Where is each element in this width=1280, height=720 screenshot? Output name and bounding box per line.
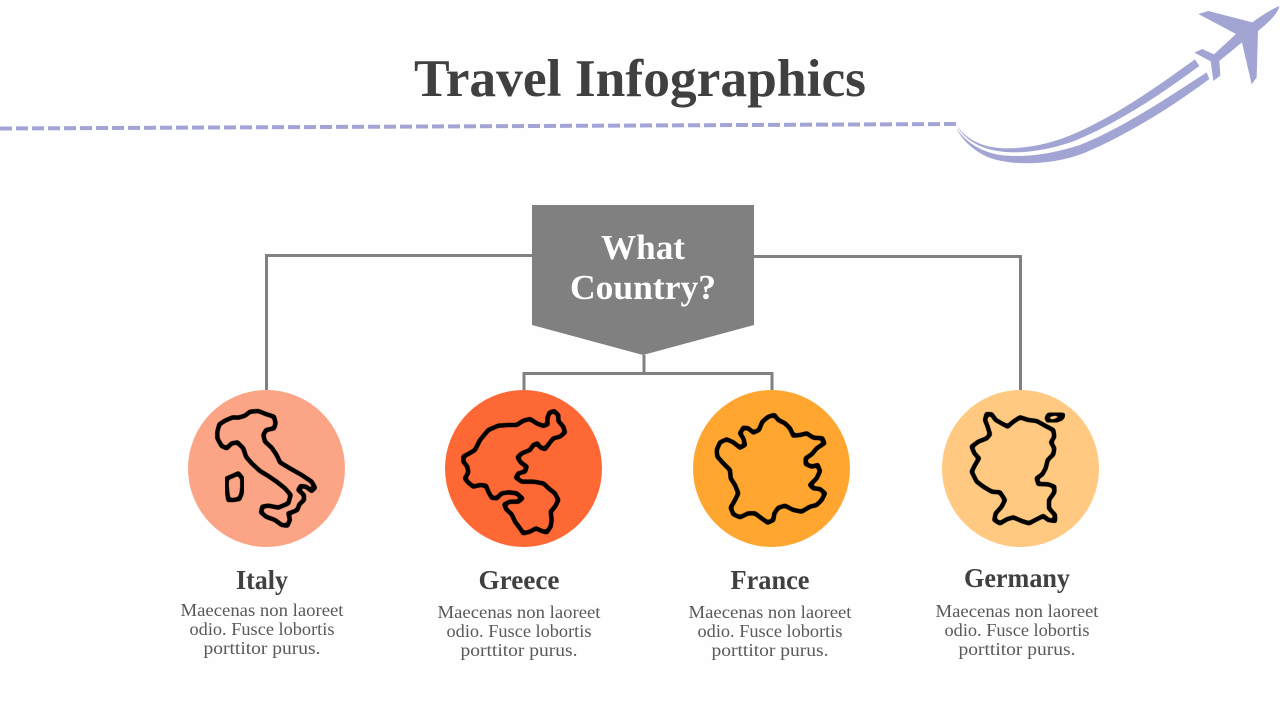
heading: Italy: Italy — [236, 565, 288, 595]
panel: Greece — [438, 390, 602, 660]
circle: Germany — [942, 390, 1099, 547]
text: Greece description: odio. Fusce lobortis — [446, 621, 592, 641]
circle: France — [693, 390, 850, 547]
text: Germany description: Maecenas non laoreet — [936, 601, 1099, 621]
circle: Greece — [445, 390, 602, 547]
callout: What Country? — [532, 205, 754, 355]
text: Greece description: porttitor purus. — [460, 640, 578, 660]
heading: Germany: Germany — [964, 563, 1070, 593]
icon: Greece map — [463, 411, 565, 533]
heading: Greece: Greece — [478, 565, 560, 595]
text: Italy description: Maecenas non laoreet — [180, 600, 344, 620]
text: Greece description — [438, 602, 601, 660]
text: France description — [688, 602, 852, 660]
icon: Italy map — [217, 411, 315, 526]
connector lines — [266, 256, 1020, 390]
callout: What Country?: What — [601, 228, 685, 267]
text: Italy description — [180, 600, 344, 658]
panel: Italy — [180, 390, 345, 658]
callout: What Country?: Country? — [570, 268, 716, 307]
text: Germany description: odio. Fusce lobortis — [944, 620, 1090, 640]
text: France description: porttitor purus. — [712, 640, 828, 660]
panel: France — [688, 390, 852, 660]
text: Italy description: odio. Fusce lobortis — [190, 619, 335, 639]
text: France description: odio. Fusce lobortis — [698, 621, 843, 641]
panel: Germany — [936, 390, 1099, 659]
heading: France: France — [730, 565, 810, 595]
text: Germany description — [936, 601, 1099, 659]
circle: Italy — [188, 390, 345, 547]
icon: France map — [717, 415, 825, 523]
icon: airplane with contrails — [957, 6, 1279, 163]
text: Germany description: porttitor purus. — [958, 639, 1076, 659]
text: Greece description: Maecenas non laoreet — [438, 602, 601, 622]
text: France description: Maecenas non laoreet — [688, 602, 852, 622]
dashed flight path — [0, 124, 957, 128]
title: Travel Infographics — [414, 50, 866, 108]
text: Italy description: porttitor purus. — [204, 638, 320, 658]
icon: Germany map — [972, 413, 1063, 523]
